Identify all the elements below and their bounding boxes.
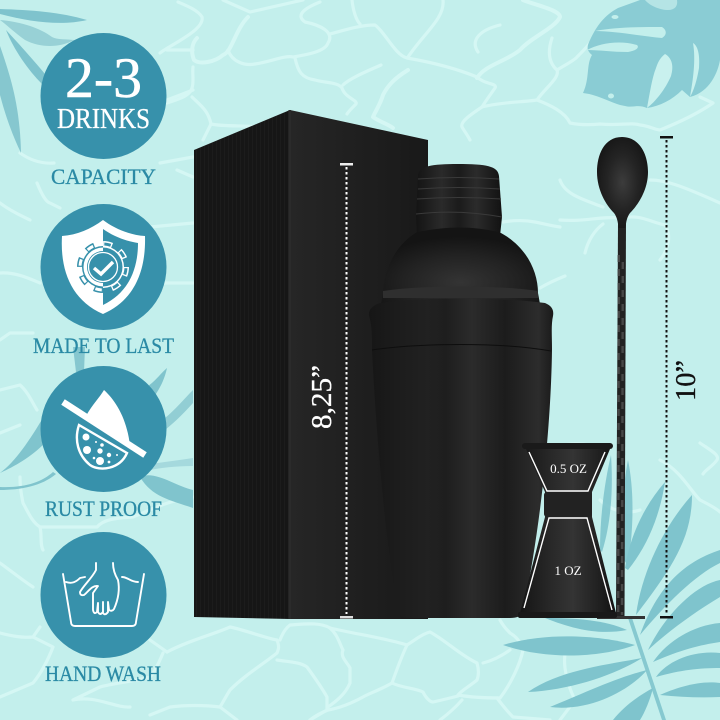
product: cocktail shaker	[369, 164, 553, 618]
badge: hand wash	[40, 532, 166, 686]
badge: made to last	[33, 204, 174, 358]
leaf: top-left fronds	[0, 9, 87, 153]
badge: hand wash: HAND WASH	[45, 661, 161, 686]
icon: water drop over bar	[63, 390, 145, 469]
product: bar spoon	[597, 137, 648, 619]
icon: shield with gear	[62, 220, 145, 314]
product: jigger: 1 OZ	[554, 563, 582, 578]
badge: made to last: MADE TO LAST	[33, 333, 174, 358]
badge: capacity	[40, 33, 166, 189]
badge: rust proof	[40, 366, 166, 521]
spoon height dimension: 10”	[671, 360, 702, 401]
badge: capacity: 2-3	[65, 47, 142, 110]
badge: capacity: CAPACITY	[51, 164, 156, 189]
badge: rust proof: RUST PROOF	[45, 496, 162, 521]
box height dimension: 8,25”	[307, 365, 338, 429]
leaf: behind rust proof icon	[0, 347, 193, 508]
leaf: top-right monstera	[583, 0, 720, 108]
product: gift box	[194, 110, 428, 619]
leaf: bottom-right palm	[503, 455, 720, 720]
icon: hand in wash basin	[63, 563, 144, 626]
product: jigger	[518, 443, 617, 618]
product: jigger: 0.5 OZ	[550, 461, 587, 476]
badge: capacity: DRINKS	[57, 104, 150, 135]
